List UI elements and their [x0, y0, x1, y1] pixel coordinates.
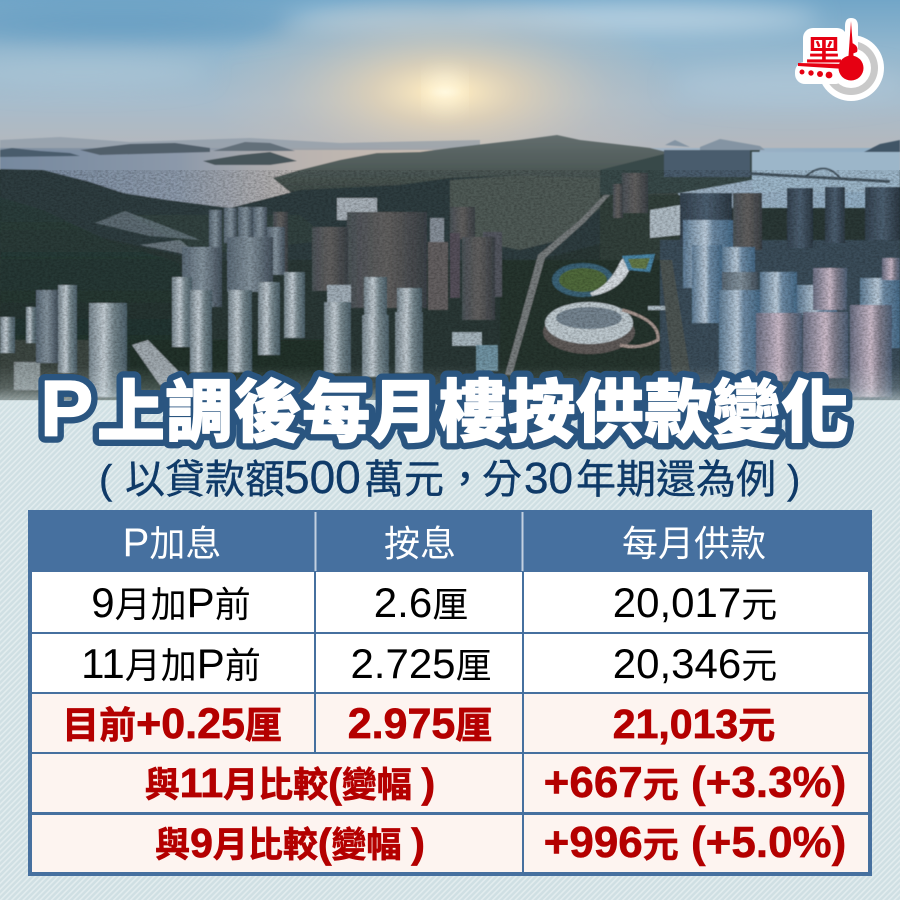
- table header row: 按息: [384, 523, 456, 564]
- row: before November hike: 20,346元: [613, 640, 777, 687]
- title: P: [40, 364, 94, 453]
- row: before November hike: 11月加P前: [81, 640, 261, 687]
- row: compared with November: 與11月比較(變幅 ): [145, 760, 435, 806]
- row: current rate: 21,013元: [613, 701, 775, 747]
- row: before November hike: 2.725厘: [350, 640, 492, 687]
- row: compared with September: 與9月比較(變幅 ): [155, 820, 425, 866]
- row: current rate: [62, 700, 775, 748]
- row: current rate: 目前+0.25厘: [62, 700, 282, 748]
- subtitle: 500: [284, 451, 361, 503]
- title: 上調後每月樓按供款變化: [97, 375, 849, 451]
- row: before September hike: 9月加P前: [91, 579, 251, 626]
- row: before September hike: [91, 579, 777, 626]
- title: P: [40, 364, 94, 453]
- subtitle: ): [787, 458, 800, 502]
- row: compared with September: +996元 (+5.0%): [544, 818, 846, 867]
- subtitle: 萬元: [364, 458, 444, 502]
- row: current rate: 2.975厘: [348, 700, 492, 748]
- background photo: Tseung Kwan O skyline at sunset: [0, 0, 900, 400]
- table: [28, 510, 872, 876]
- row: before November hike: [81, 640, 777, 687]
- subtitle: 年期還為例: [576, 458, 776, 502]
- towers, right pale rows: [683, 220, 733, 288]
- title: 上調後每月樓按供款變化: [97, 375, 849, 451]
- low-rise buildings: [452, 332, 482, 346]
- towers, back rows: [337, 198, 377, 220]
- table header row: [123, 521, 766, 565]
- row: before September hike: 20,017元: [613, 579, 777, 626]
- subtitle: (: [99, 458, 113, 502]
- table header row: 每月供款: [622, 523, 766, 564]
- row: compared with November: [145, 758, 846, 807]
- subtitle: ，: [445, 458, 485, 502]
- towers, right dark row: [680, 193, 732, 247]
- row: compared with September: [155, 818, 846, 867]
- hatched pale background fading over the photo: [0, 365, 900, 900]
- table header row: P加息: [123, 521, 221, 565]
- logo: red and grey media mark: 黑: [805, 35, 843, 77]
- sports ground and arena: [552, 263, 614, 297]
- subtitle: 以貸款額: [125, 458, 285, 502]
- logo: red and grey media mark: [795, 18, 884, 101]
- subtitle: 分: [482, 458, 522, 502]
- towers, front pale rows: [26, 307, 36, 343]
- subtitle: 30: [524, 454, 573, 503]
- row: before September hike: 2.6厘: [374, 579, 468, 626]
- row: compared with November: +667元 (+3.3%): [544, 758, 846, 807]
